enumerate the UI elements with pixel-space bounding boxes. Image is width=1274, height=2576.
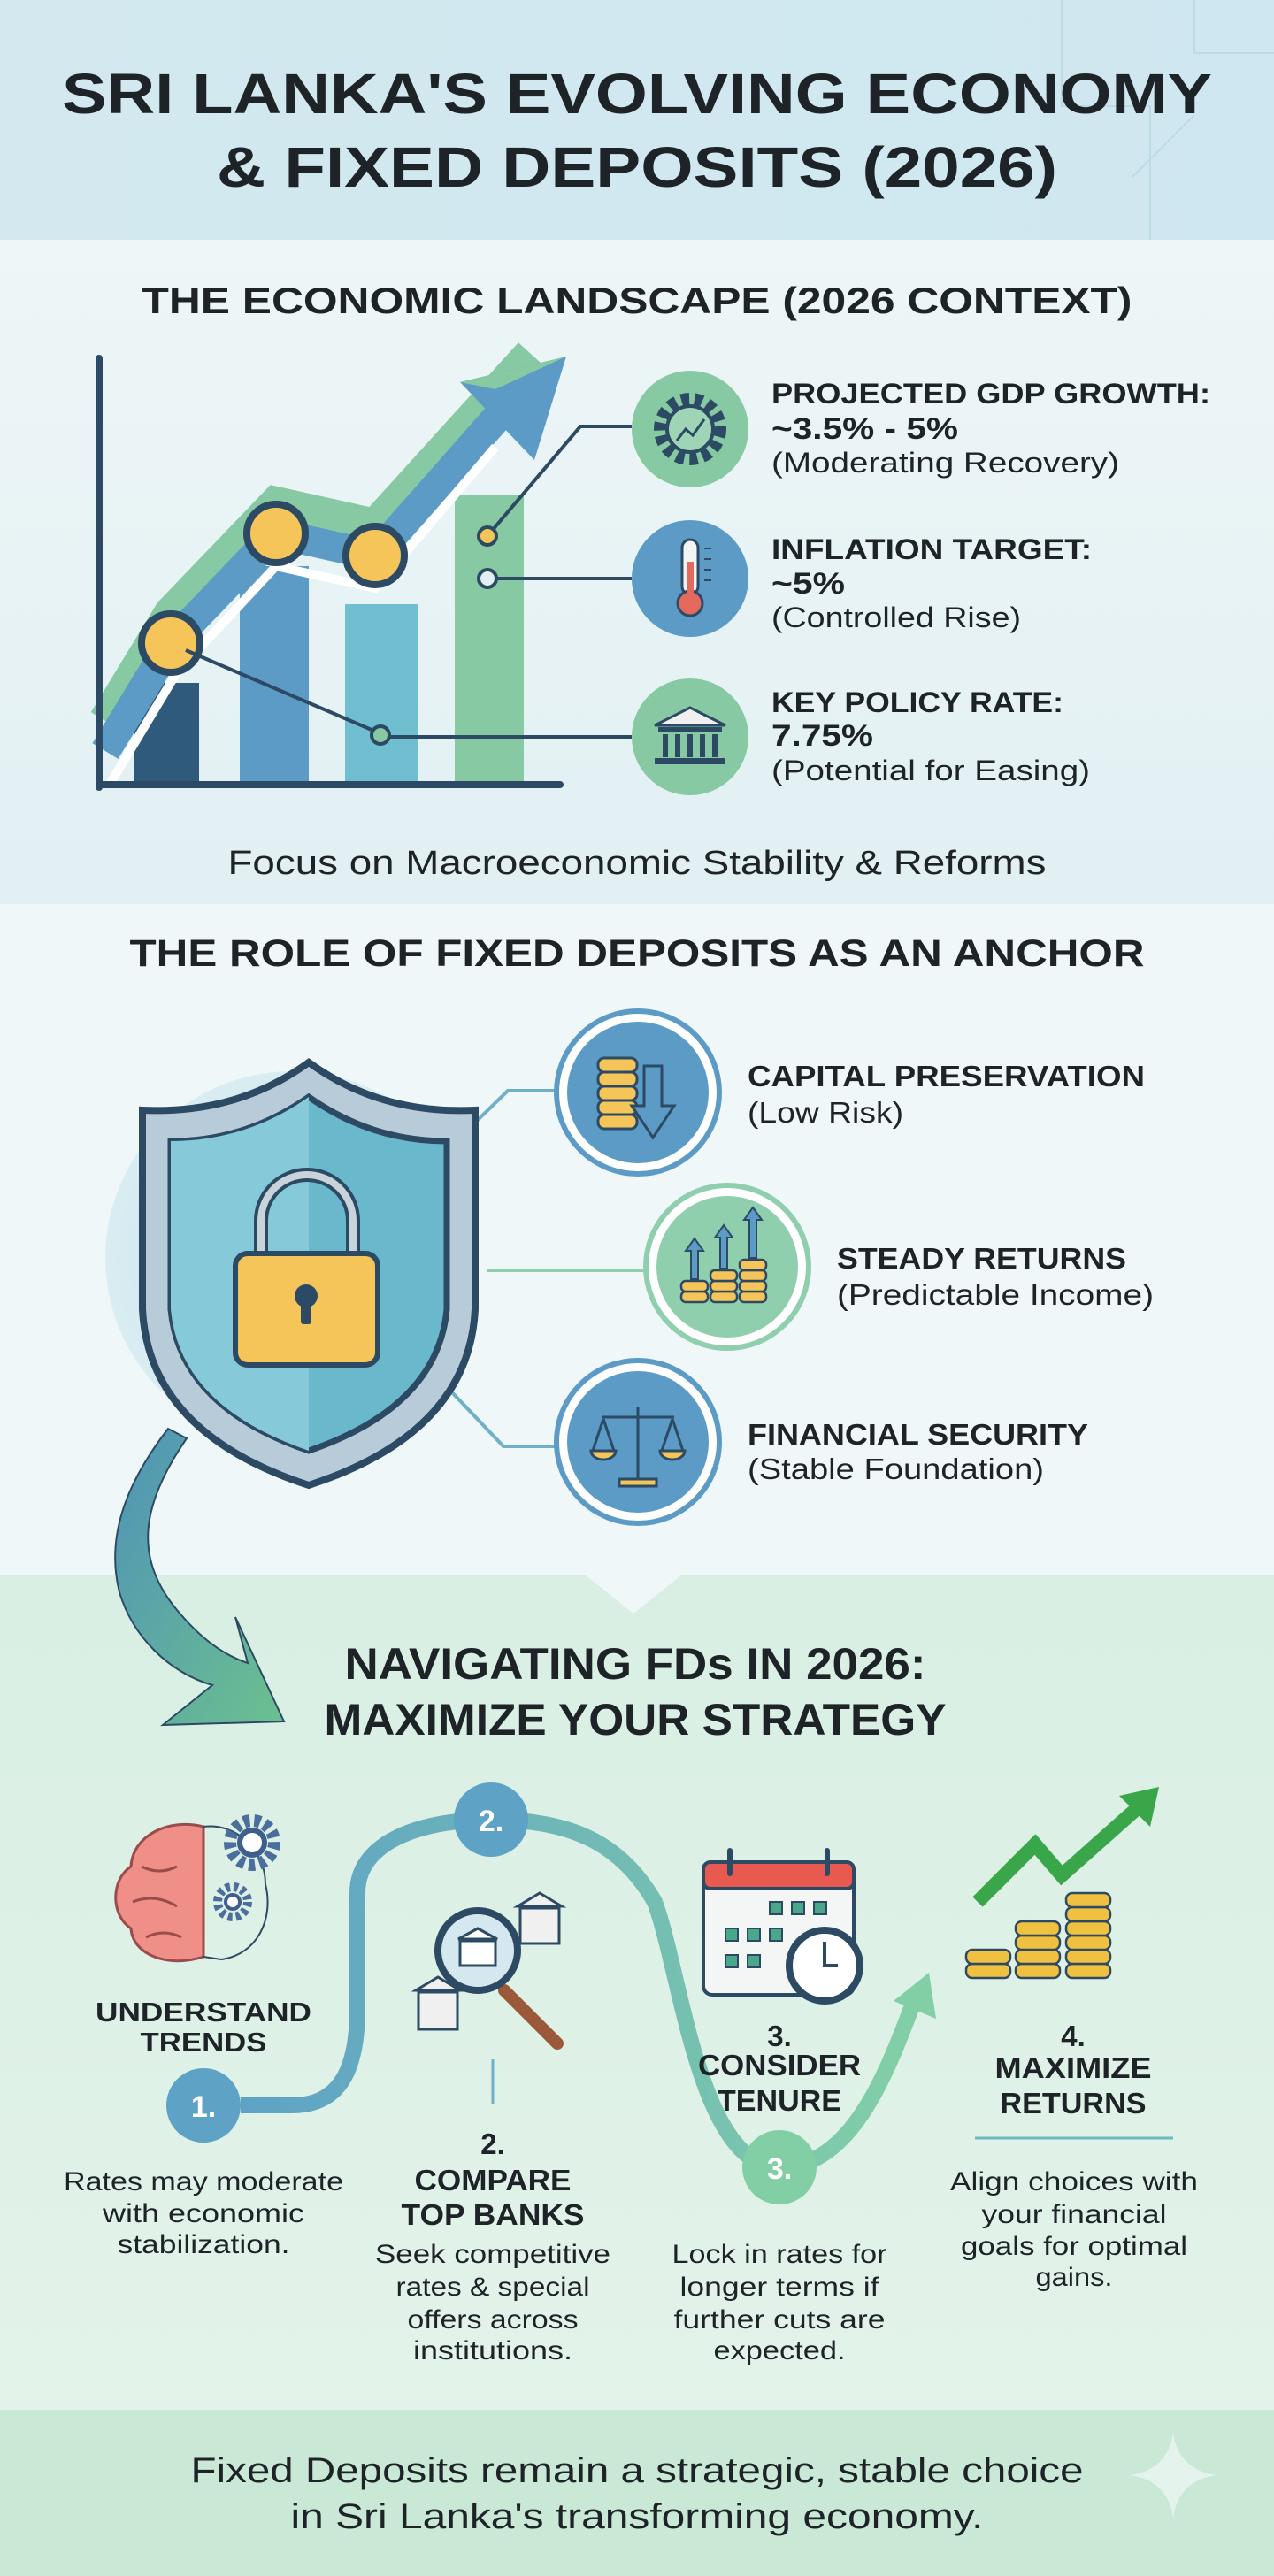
step 2 description: rates & special — [396, 2273, 589, 2302]
stat: policy rate: KEY POLICY RATE: — [771, 686, 1063, 718]
step 3 description: further cuts are — [674, 2305, 885, 2334]
step 1 title: TRENDS — [140, 2027, 267, 2058]
icon: magnifier over banks — [416, 1893, 562, 2043]
connectors — [186, 426, 632, 744]
stat: policy rate: (Potential for Easing) — [771, 755, 1090, 786]
step 2 title: TOP BANKS — [402, 2198, 584, 2231]
stat: inflation — [771, 533, 1092, 633]
benefit: financial security — [748, 1418, 1088, 1485]
step marker 2 — [454, 1782, 528, 1857]
connectors: shield to benefits — [450, 1091, 646, 1446]
step 2 title — [402, 2128, 584, 2231]
footer — [0, 2410, 1274, 2576]
step 4 title: 4. — [1061, 2020, 1086, 2052]
stat: GDP growth: PROJECTED GDP GROWTH: — [771, 378, 1210, 410]
heading: navigating: NAVIGATING FDs IN 2026: — [345, 1639, 925, 1689]
step marker 3 — [742, 2130, 817, 2204]
step marker 1: 1. — [191, 2090, 216, 2124]
step 3 title: 3. — [767, 2020, 792, 2052]
step 3 description — [672, 2240, 886, 2365]
benefit: steady returns — [837, 1242, 1154, 1311]
chart: growth bars with arrow — [99, 354, 566, 787]
stat: GDP growth — [771, 378, 1210, 479]
heading: navigating — [324, 1639, 947, 1744]
icon: thermometer — [632, 520, 748, 637]
panel: navigating FDs — [0, 1429, 1274, 2410]
icon: capital preservation coins — [556, 1011, 719, 1174]
arrow: curved from shield — [115, 1429, 284, 1725]
title: SRI LANKA'S EVOLVING ECONOMY — [62, 62, 1212, 126]
step 1 description: with economic — [102, 2199, 304, 2228]
benefit: steady returns: STEADY RETURNS — [837, 1242, 1126, 1275]
title — [62, 62, 1212, 199]
path: step connector — [241, 1820, 936, 2167]
benefit: capital preservation: CAPITAL PRESERVATION — [748, 1060, 1145, 1092]
stat: policy rate: 7.75% — [771, 719, 873, 753]
step marker 3: 3. — [767, 2152, 792, 2186]
caption: focus: Focus on Macroeconomic Stability & Reforms — [228, 845, 1046, 882]
step 4 description — [950, 2167, 1198, 2292]
benefit: capital preservation — [748, 1060, 1145, 1129]
step 4 description: goals for optimal — [961, 2232, 1187, 2261]
step 4 title — [975, 2020, 1173, 2138]
step 1 title — [96, 1997, 311, 2058]
step 2 description: offers across — [407, 2305, 579, 2334]
benefit: financial security: (Stable Foundation) — [748, 1453, 1044, 1485]
heading: economic landscape: THE ECONOMIC LANDSCAPE (2026 CONTEXT) — [142, 280, 1132, 321]
icon: steady returns coins — [646, 1185, 809, 1348]
step 3 title: CONSIDER — [698, 2049, 861, 2082]
stat: inflation: ~5% — [771, 567, 845, 601]
stat: inflation: INFLATION TARGET: — [771, 533, 1092, 565]
footer text — [191, 2451, 1083, 2536]
step 2 title: COMPARE — [414, 2164, 572, 2196]
step 2 description — [375, 2240, 610, 2365]
stat: GDP growth: ~3.5% - 5% — [771, 412, 958, 446]
step 1 description — [64, 2167, 343, 2259]
footer text: Fixed Deposits remain a strategic, stable choice — [191, 2451, 1083, 2490]
heading: anchor: THE ROLE OF FIXED DEPOSITS AS AN ANCHOR — [129, 932, 1145, 975]
panel: economic landscape — [0, 240, 1274, 904]
heading: navigating: MAXIMIZE YOUR STRATEGY — [324, 1695, 947, 1744]
step 2 title: 2. — [480, 2128, 505, 2160]
step 3 description: Lock in rates for — [672, 2240, 886, 2269]
step 3 title: TENURE — [718, 2084, 841, 2117]
benefit: steady returns: (Predictable Income) — [837, 1278, 1154, 1311]
icon: gear with trend — [632, 371, 748, 487]
icon: sparkle — [1130, 2433, 1216, 2518]
step 1 description: Rates may moderate — [64, 2167, 343, 2196]
icon: brain and gears — [116, 1821, 274, 1961]
icon: bank — [632, 678, 748, 795]
step 4 title: RETURNS — [1000, 2087, 1147, 2120]
step 1 description: stabilization. — [117, 2230, 290, 2259]
stat: policy rate — [771, 686, 1090, 786]
icon: rising arrow and coins — [966, 1787, 1159, 1978]
step 4 description: Align choices with — [950, 2167, 1198, 2196]
footer text: in Sri Lanka's transforming economy. — [290, 2497, 984, 2536]
step 2 description: institutions. — [413, 2336, 572, 2365]
icon: scales — [556, 1361, 719, 1523]
header band — [0, 0, 1274, 240]
step 1 title: UNDERSTAND — [96, 1997, 311, 2028]
panel: role of fixed deposits — [0, 904, 1274, 1575]
step 4 description: your financial — [982, 2200, 1166, 2229]
step marker 2: 2. — [479, 1805, 503, 1838]
benefit: financial security: FINANCIAL SECURITY — [748, 1418, 1088, 1451]
icon: shield with lock — [105, 1062, 479, 1485]
stat: GDP growth: (Moderating Recovery) — [771, 447, 1119, 479]
title: & FIXED DEPOSITS (2026) — [217, 135, 1057, 199]
benefit: capital preservation: (Low Risk) — [748, 1096, 903, 1129]
step marker 1 — [166, 2068, 241, 2143]
step 4 title: MAXIMIZE — [994, 2051, 1152, 2084]
step 2 description: Seek competitive — [375, 2240, 610, 2269]
step 4 description: gains. — [1035, 2263, 1113, 2292]
step 3 description: expected. — [713, 2336, 846, 2365]
step 3 title — [698, 2020, 861, 2117]
icon: calendar and clock — [703, 1851, 860, 2001]
step 3 description: longer terms if — [679, 2273, 879, 2302]
stat: inflation: (Controlled Rise) — [771, 602, 1021, 633]
